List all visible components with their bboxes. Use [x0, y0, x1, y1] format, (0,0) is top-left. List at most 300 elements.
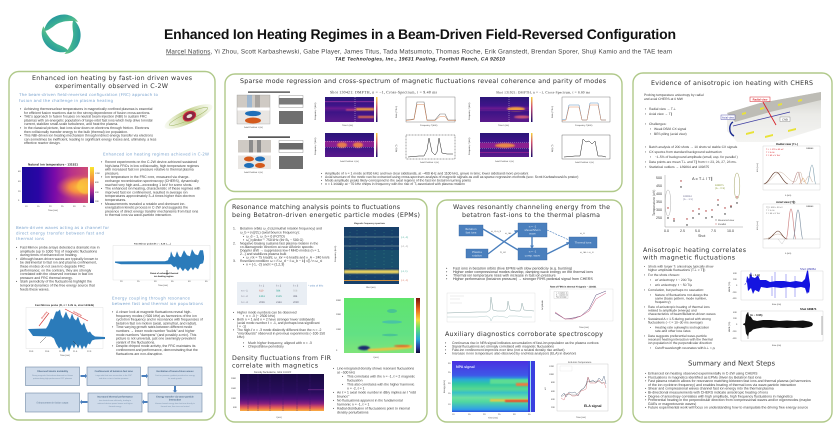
text block: higher modes: Chirped/slow periodicity — [248, 344, 284, 348]
chart: natural ion temperature heatmap: 35 — [83, 205, 86, 208]
chart: shot 131921 cross spectra: Rate (T²/Hz) — [551, 106, 554, 118]
chart: Mirnov probe signal: 40 — [188, 280, 191, 283]
text block: regimes: energization kinetic process in C-2W and suggests the — [105, 206, 188, 210]
text block: beam-driven waves: feeds these waves. — [20, 287, 49, 291]
chart: natural ion temperature heatmap: 15 — [37, 205, 40, 208]
chart: shot 189864 signal: 200 — [733, 278, 737, 281]
chart: shot 189864 signal: Shot 189864 — [800, 267, 816, 271]
chart: natural ion temperature heatmap: 800 — [95, 181, 99, 184]
text block: summary: Preferential heating in the perpendicular direction from compressional waves and/or eigenmodes (maybe — [648, 398, 811, 402]
text block: summary: • — [645, 379, 647, 383]
table: resonance frequencies: 2096 — [259, 301, 265, 304]
text block: summary: Bi-directional measurements with CHERS indicate anisotropic heating of ions — [648, 390, 768, 394]
text block: anisotropic heating: resonant heating interaction with the thermal — [648, 338, 713, 342]
text block: higher modes: n = -3 (~ 2500 kHz) — [246, 314, 275, 318]
text block: anisotropic heating: Sustained A > 1.5 during period with strong — [648, 317, 711, 321]
text block: summary: • — [645, 372, 647, 376]
text block: summary: • — [645, 398, 647, 402]
chart: magnetic frequency spectrum: (-1, -1) — [401, 236, 408, 239]
text block: anisotropic heating: ion population in the perpendicular direction — [648, 341, 712, 345]
chart: mode regression set 1 — [237, 92, 303, 129]
chart: anisotropy scatter: 10.0 — [727, 229, 734, 233]
text block: density fluctuations: at ~500 kHz — [337, 370, 355, 374]
chart: density fluctuations: 2000 — [231, 377, 237, 380]
text block: anisotropic heating: • — [650, 283, 652, 287]
text block: anisotropic heating: Shots with larger Tᵢ anisotropy typically show — [648, 264, 714, 268]
text block: higher modes: ℓ = -1) — [237, 324, 246, 328]
text block: anisotropic heating: fluctuations (~ t = 10–30 ms average) — [648, 320, 703, 324]
text block: regimes: reached very high and—exceeding 1 keV for some shots. — [105, 183, 192, 187]
text block: approach: TAE's approach to fusion focuses on neutral beam injection (NBI) to sustain FRC — [24, 115, 147, 119]
chart: ELA signal — [544, 361, 608, 419]
text block: regimes: exchange recombination spectroscopy (CHERS), dynamically — [105, 179, 199, 183]
text block: density fluctuations: Radial distribution of fluctuations point to internal — [337, 406, 410, 410]
chart: radial view spectrum — [756, 142, 820, 197]
text block: resonance conditions — [233, 226, 330, 266]
flow diagram: Confinement of betatron fast ions — [95, 370, 133, 373]
chart: shot 130421 cross spectra: B(z) (T) — [395, 144, 398, 152]
panel heading: Sparse mode regression and cross-spectrum of magnetic fluctuations reveal coherence and parity of modes — [240, 78, 606, 85]
text block: anisotropic heating: Cutoff wavelength resonates with k⊥ ≈ ρᵢ — [655, 346, 715, 350]
text block: CHERS views: Radial view → T⊥ — [649, 107, 676, 111]
text block: higher modes: • — [233, 310, 235, 314]
heading: density fluctuations — [232, 355, 332, 370]
text block: mode findings: • — [321, 178, 323, 182]
text block: summary: • — [645, 387, 647, 391]
subheading: beam-driven waves — [16, 225, 109, 241]
chart: burst waveform: Fast Mirnov probe (R, z = 0.25 m, shot 143545) — [35, 304, 94, 307]
chart: magnetic frequency spectrum: (-1, -1) — [401, 279, 408, 282]
chart: shot 189864 signal: -200 — [732, 291, 737, 294]
text block: summary: Fast plasma rotation allows for resonance matching between fast ions and thermal plasma (at harmonics — [648, 379, 811, 383]
text block: higher modes: • — [243, 341, 245, 345]
text block: CHERS views: • — [645, 122, 647, 126]
text block: regimes: Ion temperature in the FRC core, measured via charge- — [105, 175, 189, 179]
chart: NPA signal: 10 — [448, 403, 451, 406]
chart: natural ion temperature heatmap: 0 — [18, 199, 20, 202]
chart: anisotropy scatter: 500 — [656, 176, 662, 180]
panel: anisotropic ion heating — [633, 73, 832, 422]
panel heading — [32, 75, 192, 90]
text block: anisotropic heating: same (basis pattern, mode number, — [655, 296, 707, 300]
text block: density fluctuations — [333, 366, 416, 414]
flow diagram: Large-orbit fast ions accumulate in the FRC — [95, 374, 133, 377]
table: resonance frequencies — [237, 282, 324, 305]
chart: NPA signal: 20 — [448, 382, 451, 385]
chart: burst waveform: Time (ms) — [60, 354, 70, 357]
text block: anisotropic heating: For the shots chosen: — [648, 273, 680, 277]
chart: FIHS signal: II - 1 (option 2) — [556, 294, 568, 296]
text block: resonance conditions: n = {-1, -2} and ℓ = {1,2,3} — [246, 262, 285, 266]
chart: density fluctuations: 500 — [233, 406, 237, 409]
text block: energy coupling: • — [112, 325, 114, 329]
text block: resonance conditions: ω_cylinder ~ 750 kHz (for B₀ ~ 500 G) — [246, 238, 303, 242]
flow diagram: energy channel: Plasma — [472, 250, 482, 254]
chart: burst waveform: 20.0 — [29, 350, 34, 353]
text block: higher modes: (axial mode number ℓ = -1, and perhaps less significant — [237, 321, 320, 325]
chart: ELA signal: 1200 — [549, 365, 555, 368]
text block: resonance conditions: Resonant condition ω = n ω_d − ℓ ω_b − k∥ v∥ / n ω_ci — [240, 259, 323, 263]
chart: axial view spectrum: Int. (a.u.) — [756, 221, 759, 230]
text block: mode findings: Amplitude of n = 1 mode at 850 kHz and two clear sidebands, at ~400 kHz and 1100 kHz, grows in time; lower sideband more prevalent — [325, 172, 528, 176]
chart: shot 189864 signal — [728, 267, 823, 306]
text block: CHERS views: • — [645, 112, 647, 116]
text block: energy coupling: cyclotron frequency and in resonance with frequencies of — [116, 318, 203, 322]
text block: anisotropic heating: related to amplitude (energy) and — [648, 308, 697, 312]
chart: shot 189875 signal: (A ~ 0.95) — [750, 313, 762, 317]
text block: regimes: with increased fast ion pressure relative to thermal plasma — [105, 168, 194, 172]
chart: shot 189875 signal: 0 — [736, 323, 738, 326]
text block: beam-driven waves: during times of enhanced ion heating. — [20, 253, 77, 257]
flow diagram: probes during high-performance FRC plasmas — [33, 377, 72, 380]
text block: anisotropic heating: • — [644, 288, 646, 292]
text block: regimes: Recent experiments on the C-2W device achieved sustained — [105, 160, 197, 164]
chart: ELA signal: eV — [544, 387, 547, 390]
text block: summary: Shear and compressional waves channel fast ion energy into the thermal plasma — [648, 387, 774, 391]
text block: regimes: temperatures. — [105, 198, 126, 202]
chart: natural ion temperature heatmap: 400 — [95, 191, 99, 194]
chart: green mode amplitude map: 2000 — [336, 313, 342, 316]
chart: anisotropy scatter: (A ~ 1.5) — [683, 198, 693, 201]
chart: natural ion temperature heatmap: 25 — [61, 205, 64, 208]
chart: green mode amplitude map: 0 — [336, 349, 338, 352]
text block: higher modes: "microbursts" observed in previous experiments (~100-150 — [237, 332, 325, 336]
text block: approach: • — [20, 126, 22, 130]
flow diagram — [26, 367, 202, 412]
text block: regimes: pressure. — [105, 171, 119, 175]
figure: CHERS machine views: Axial view — [722, 117, 734, 120]
chart: anisotropy scatter: 400 — [656, 192, 662, 196]
chart: radial view spectrum: T = 5 ms — [766, 151, 775, 154]
panel heading: betatron fast-ions to the thermal plasma — [462, 212, 600, 219]
text block: density fluctuations: This correlates with the n = -1, ℓ = 2 magnetic — [347, 374, 415, 378]
flow diagram: reduced electron power losses and higher — [97, 402, 133, 405]
text block: mode findings — [321, 172, 578, 186]
table: resonance frequencies: n = -3 — [241, 301, 248, 304]
chart: NPA signal: 10 — [452, 413, 455, 416]
flow diagram: Strong magnetic fluctuations observed on Mirnov — [32, 374, 73, 377]
text block: approach: effective reactor design. — [24, 141, 60, 145]
text block: auxiliary diagnostics: • — [445, 348, 447, 352]
panel: resonance matching — [225, 199, 427, 422]
text block: auxiliary diagnostics: Continuous rise in NPA signal indicates accumulation of fast-ion population as the plasma evolves — [452, 341, 599, 345]
text block: energy coupling: numbers → lower mode number "builds" and higher — [116, 329, 196, 333]
text block: waves: • — [446, 274, 448, 278]
subheading: energy coupling — [112, 296, 203, 306]
subheading: approach — [18, 92, 159, 103]
text block: CHERS views: Axial view → T∥ — [649, 112, 673, 116]
text block: approach: Achieving thermonuclear temperatures in magnetically confined plasmas is essential — [24, 107, 153, 111]
chart: burst waveform: 22.0 — [87, 350, 92, 353]
chart: Mirnov probe signal: Time (ms) — [158, 284, 168, 287]
chart: natural ion temperature heatmap: 40 — [18, 180, 21, 183]
panel heading: being Betatron-driven energetic particle modes (EPMs) — [232, 212, 420, 219]
logo — [37, 14, 88, 59]
chart: axial view spectrum: F = 68 ± 8 Torr — [766, 212, 781, 215]
chart: shot 189875 signal: Shot 189875 — [800, 307, 817, 311]
chart: natural ion temperature heatmap: 10 — [25, 205, 28, 208]
flow diagram: energy channel: Ω_rot — [500, 251, 506, 254]
text block: approach: • — [20, 115, 22, 119]
chart: magnetic frequency spectrum: (-2, -1) — [401, 245, 408, 248]
text block: beam-driven waves: these modes do not seem to degrade FRC — [20, 264, 85, 268]
chart: shot 189864 signal: 400 — [733, 272, 737, 275]
text block: CHERS views: and axial CHERS at 0 MW — [644, 97, 684, 101]
text block: CHERS views: • — [650, 132, 652, 136]
chart: shot 130421 cross spectra: Rate (T²/Hz) — [395, 106, 398, 118]
text block: resonance conditions: 2...) and stabilizes plasma bulk — [240, 252, 287, 256]
chart: radial view spectrum: F = 60 ± 5 Torr — [766, 154, 781, 157]
chart: anisotropy scatter: 189864 — [683, 195, 692, 198]
text block: summary: Future experimental work will focus on understanding how to manipulate the driving free energy source — [648, 406, 808, 410]
chart: anisotropy scatter: Shot — [698, 234, 705, 238]
flow diagram: energy channel: n = -1 — [529, 250, 537, 254]
chart: anisotropy scatter: Temperature (eV) — [652, 190, 656, 216]
panel: waves channeling energy — [437, 200, 622, 422]
table: resonance frequencies: n = -1 — [241, 290, 248, 292]
chart: NPA signal: 35 — [528, 413, 531, 416]
text block: analysis: Statistical outliers → 189864 and 189875 — [649, 165, 709, 169]
chart: axial view spectrum: T∥ = 590 ± 90 eV — [766, 206, 783, 209]
text block: CHERS views — [644, 93, 704, 136]
text block: energy coupling: A closer look at magnetic fluctuations reveal high- — [116, 310, 191, 314]
text block: anisotropic heating: • — [650, 293, 652, 297]
table: resonance frequencies: 2090 — [293, 301, 299, 304]
chart: radial view spectrum: T⊥ = 470 ± 80 eV — [766, 148, 784, 151]
text block: anisotropic heating: • — [650, 346, 652, 350]
chart: natural ion temperature heatmap: 60 — [18, 170, 21, 173]
text block: regimes: • — [101, 202, 103, 206]
text block: anisotropic heating: rate and other loss rates — [655, 329, 691, 333]
text block: regimes: Measurements revealed a notable and dominant ion- — [105, 202, 185, 206]
chart: burst waveform: 21.0 — [59, 350, 64, 353]
text block: energy coupling: fluctuations are non-disruptive. — [116, 352, 163, 356]
chart: ELA signal: 200 — [551, 406, 555, 409]
text block: energy coupling: picture is not universal, just one seemingly prevalent — [116, 337, 196, 341]
text block: energy coupling: Despite chirped mode activity, the FRC maintains its — [116, 344, 196, 348]
text block: density fluctuations: • — [342, 382, 344, 386]
table: resonance frequencies: ℓ = 3 — [293, 284, 299, 288]
text block: summary — [645, 372, 811, 410]
chart: radial view spectrum: λ (nm) — [785, 194, 791, 197]
text block: approach: can sometimes be inefficient, leading to significant energy losses and, ultimately, a less — [24, 137, 157, 141]
chart: natural ion temperature heatmap: 1200 — [95, 172, 101, 175]
text block: auxiliary diagnostics: • — [445, 344, 447, 348]
text block: higher modes: • — [243, 314, 245, 318]
text block: resonance conditions: 1. — [233, 226, 236, 230]
chart: ELA signal: 1000 — [549, 373, 555, 376]
chart: shot 130421 cross spectra: Axial Position z (m) — [340, 160, 359, 163]
text block: anisotropic heating: • — [644, 317, 646, 321]
text block: summary: Fluctuations in magnetics identified as EPMs driven by Betatron fast ions — [648, 375, 762, 379]
text block: anisotropic heating: • — [650, 326, 652, 330]
chart: anisotropy scatter: A = T⊥ / T∥ — [692, 176, 713, 181]
flow diagram: energy channel: fast ions — [466, 230, 477, 234]
text block: waves: Fast ions in betatron orbits drive EPMs with slow periodicity (e.g. bursting) — [453, 266, 572, 270]
chart: anisotropy scatter: 0.0 — [664, 229, 669, 233]
text block: higher modes: Higher mode numbers can be observed — [237, 310, 297, 314]
text block: beam-driven waves: Although beam-driven waves are typically known to — [20, 257, 98, 261]
heading: density fluctuations: Density fluctuations from FIR — [232, 355, 332, 362]
text block: analysis: • — [645, 150, 647, 154]
chart: density fluctuations: 1500 — [231, 387, 237, 390]
chart: radial view spectrum: 189864 — [806, 147, 814, 150]
chart: shot 130421 cross spectra: Frequency f (kHz) — [314, 137, 317, 155]
chart: density fluctuations: t (ms) — [276, 416, 282, 419]
flow diagram: Increased thermal performance — [97, 396, 133, 398]
chart: shot 189864 signal: dB/dt (T/s) — [728, 282, 731, 292]
chart: shot 131921 cross spectra: Frequency f (kHz) — [575, 124, 593, 127]
subheading: beam-driven waves: direct energy transfer between fast and — [16, 231, 104, 236]
chart: shot 189864 signal: -400 — [732, 297, 737, 300]
chart: shot 130421 cross spectra: Frequency f (kHz) — [420, 124, 438, 127]
chart: NPA signal: 15 — [468, 413, 471, 416]
chart: shot 130421 cross spectra: Shot 130421: DMPTH, n = −1, Cross-Spectrum, t = 9.40 ms — [330, 90, 437, 94]
chart: shot 189875 signal: -200 — [732, 330, 737, 333]
text block: resonance conditions: Betatron orbits ω_d (azimuthal rotation frequency) and — [240, 226, 322, 230]
text block: energy coupling: mode numbers "dampens" (and possibly a mix). This — [116, 333, 197, 337]
chart: shot 189875 signal: -400 — [732, 337, 737, 340]
text block: density fluctuations: density perturbations — [337, 410, 369, 414]
chart: anisotropy scatter: 5.0 — [695, 229, 700, 233]
chart: NPA signal: 25 — [448, 371, 451, 374]
chart: shot 131921 cross spectra: Shot 131921: DMPTH, n = −1, Cross-Spectrum, t = 8.80 ms — [496, 90, 591, 94]
text block: CHERS views: • — [645, 107, 647, 111]
text block: regimes: • — [101, 175, 103, 179]
chart: shot 130421 cross spectra: Frequency f (kHz) — [314, 102, 317, 120]
text block: resonance conditions: Negative biasing sustains fast plasma rotation in the — [240, 242, 318, 246]
text block: density fluctuations: • — [333, 406, 335, 410]
flow diagram: thermal energy — [109, 405, 121, 408]
chart: magnetic frequency spectrum: (-1, 1) — [401, 270, 408, 273]
chart: shot 131921 cross spectra: Axial Position z (m) — [495, 160, 514, 163]
chart: Mirnov probe signal: 35 — [171, 280, 174, 283]
heading: density fluctuations: correlate with magnetics — [232, 362, 318, 370]
subheading: approach: fusion and the challenge in plasma heating — [19, 98, 113, 103]
text block: higher modes: • — [233, 328, 235, 332]
chart: Mirnov probe signal: Onset of enhanced thermal — [150, 272, 179, 275]
heading: anisotropic heating: Anisotropic heating correlates — [643, 247, 746, 254]
text block: resonance conditions: 2. — [233, 242, 236, 246]
chart: axial view spectrum: T = 5 ms — [766, 209, 775, 212]
chart: shot 189875 signal: 400 — [733, 311, 737, 314]
chart: ELA signal: End-loss Temperature — [568, 361, 592, 364]
text block: analysis: ~1-5% of background amplitude (small, esp. for parallel ) — [655, 155, 738, 159]
text block: beam-driven waves: performance; on the contrary, they are strongly — [20, 268, 91, 272]
chart: shot 131921 cross spectra: Frequency f (kHz) — [468, 102, 471, 120]
text block: regimes: high-beta FRCs in low collisionality, high temperature regimes — [105, 164, 199, 168]
text block: beam-driven waves: Fast Mirnov probe arrays detected a dramatic rise in — [20, 246, 100, 250]
title: Enhanced Ion Heating Regimes in a Beam-Driven Field-Reversed Configuration — [164, 26, 676, 42]
text block: energy coupling — [112, 310, 203, 356]
text block: approach — [20, 107, 157, 145]
table: resonance frequencies: 584 — [276, 290, 281, 292]
chart: anisotropy scatter — [652, 173, 743, 238]
text block: regimes: • — [101, 187, 103, 191]
text block: higher modes: The high-f n = -3 mode distinctly different than the n = -2 — [237, 328, 321, 332]
text block: beam-driven waves: Stark periodicity of the fluctuations highlight the — [20, 280, 92, 284]
chart: shot 189864 signal: (A ~ 1.5) — [749, 273, 760, 277]
text block: density fluctuations: harmonic n = -1, ℓ = 1 — [337, 402, 369, 406]
chart: power spectrum — [447, 293, 535, 322]
text block: approach: In the classical picture, fast ions slow down on electrons through friction. Electrons — [24, 126, 149, 130]
text block: summary: of the ion cyclotron frequency) and enables heating of thermal ions via wave-particle interaction — [648, 383, 796, 387]
heading: anisotropic heating — [643, 247, 746, 262]
text block: anisotropic heating: • — [644, 305, 646, 309]
text block: approach: for efficient fusion reactions due to the strong dependence of fusion cross-sections. — [24, 111, 150, 115]
panel: sparse mode regression — [225, 74, 622, 192]
text block: higher modes: Both n = 1 and n = 2 have stronger lower sidebands — [237, 318, 315, 322]
text block: mode findings: • — [321, 182, 323, 186]
table: resonance frequencies: 558 — [293, 290, 298, 292]
chart: natural ion temperature heatmap: 20 — [18, 190, 21, 193]
text block: regimes — [101, 160, 200, 217]
panel heading: Enhanced ion heating by fast-ion driven waves — [32, 75, 192, 82]
chart: ELA signal: Time (ms) — [576, 416, 586, 419]
chart: anisotropy scatter: (A ~ 0.9) — [715, 187, 725, 190]
chart: NPA signal: 30 — [448, 362, 451, 365]
text block: beam-driven waves: pressure and FRC thermal energy. — [20, 276, 73, 280]
chart: anisotropy scatter: Measured view — [718, 219, 734, 222]
text block: CHERS views: • — [650, 127, 652, 131]
text block: density fluctuations: Line-integrated density shows resonant fluctuations — [337, 366, 414, 370]
text block: analysis: Data points are mean T⊥ and T∥ from t = 23, 26, 27, 28 ms. — [649, 160, 737, 164]
chart: Mirnov probe signal: 30 — [154, 280, 157, 283]
chart: FIHS signal: I - 1 (option 1) — [556, 292, 568, 294]
chart: mode regression set 2: Axial Position z (m) — [244, 171, 263, 174]
text block: higher modes: • — [233, 318, 235, 322]
text block: auxiliary diagnostics: Increase in ion temperature also observed by end-loss analyzers (ELA) in divertors — [452, 352, 576, 356]
flow diagram: energy channel: Betatron — [466, 227, 477, 231]
text block: auxiliary diagnostics: Fast-ion confinement improves over time (not a neutral density rise artifact) — [452, 348, 565, 352]
text block: waves: • — [446, 277, 448, 281]
chart: anisotropy scatter: 2.5 — [680, 229, 685, 233]
flow diagram: energy channel: wave — [529, 232, 536, 236]
flow diagram: energy channel: ω_ci — [580, 232, 585, 235]
panel heading: Evidence of anisotropic ion heating with CHERS — [651, 80, 813, 87]
flow diagram: interaction — [169, 398, 182, 402]
text block: anisotropic heating: • — [650, 278, 652, 282]
text block: energy coupling: • — [112, 344, 114, 348]
text block: waves: Higher order compressional modes develop, damping wave energy on the thermal ions — [453, 270, 593, 274]
chart: Mirnov probe signal: ion heating regime — [154, 275, 174, 278]
text block: auxiliary diagnostics: • — [445, 341, 447, 345]
text block: regimes: to thermal ions via wave-particle interaction. — [105, 213, 172, 217]
text block: resonance conditions: ω_rot = 75 krad/s; ω_tor = 6 krad/s and v_A ~ 240 km/s — [246, 256, 330, 260]
table: resonance frequencies: 1535 — [276, 295, 282, 298]
text block: waves: • — [446, 270, 448, 274]
affiliation: TAE Technologies, Inc., 19631 Pauling, Foothill Ranch, CA 92610 — [335, 56, 505, 62]
chart: shot 130421 cross spectra: Time t (ms) — [342, 124, 353, 127]
chart: NPA signal: Time (ms) — [488, 416, 498, 420]
text block: anisotropic heating: higher amplitude fluctuations (T⊥ > T∥) — [648, 268, 705, 272]
chart: NPA signal: 30 — [513, 413, 516, 416]
chart: anisotropy scatter: 250 — [656, 216, 662, 220]
text block: summary: Degree of anisotropy correlates with high amplitude, high frequency fluctuations in magnetics — [648, 394, 793, 398]
text block: density fluctuations: An ℓ = 1 axial mode number in dB/y implies an l "odd — [337, 390, 416, 394]
flow diagram: Waves channel energy from fast ions directly to — [155, 402, 195, 405]
text block: approach: current, stabilize small-scale turbulence, and heat the plasma. — [24, 122, 118, 126]
text block: mode findings: Mode amplitude peaks likely correspond to the axial regions of the fast ion betatron turning points — [325, 178, 471, 182]
chart: burst waveform: 21.5 — [73, 350, 78, 353]
text block: analysis: • — [645, 160, 647, 164]
text block: beam-driven waves: • — [16, 257, 18, 261]
text block: waves: Thermal ion temperature rises with increase in fast ion pressure — [453, 274, 556, 278]
chart: burst waveform: Growing — [40, 310, 49, 320]
text block: density fluctuations: • — [333, 366, 335, 370]
text block: resonance conditions: • — [243, 262, 245, 266]
text block: resonance conditions: Doppler shift → suppresses low-f MHD modes (n = 1, — [240, 248, 320, 252]
